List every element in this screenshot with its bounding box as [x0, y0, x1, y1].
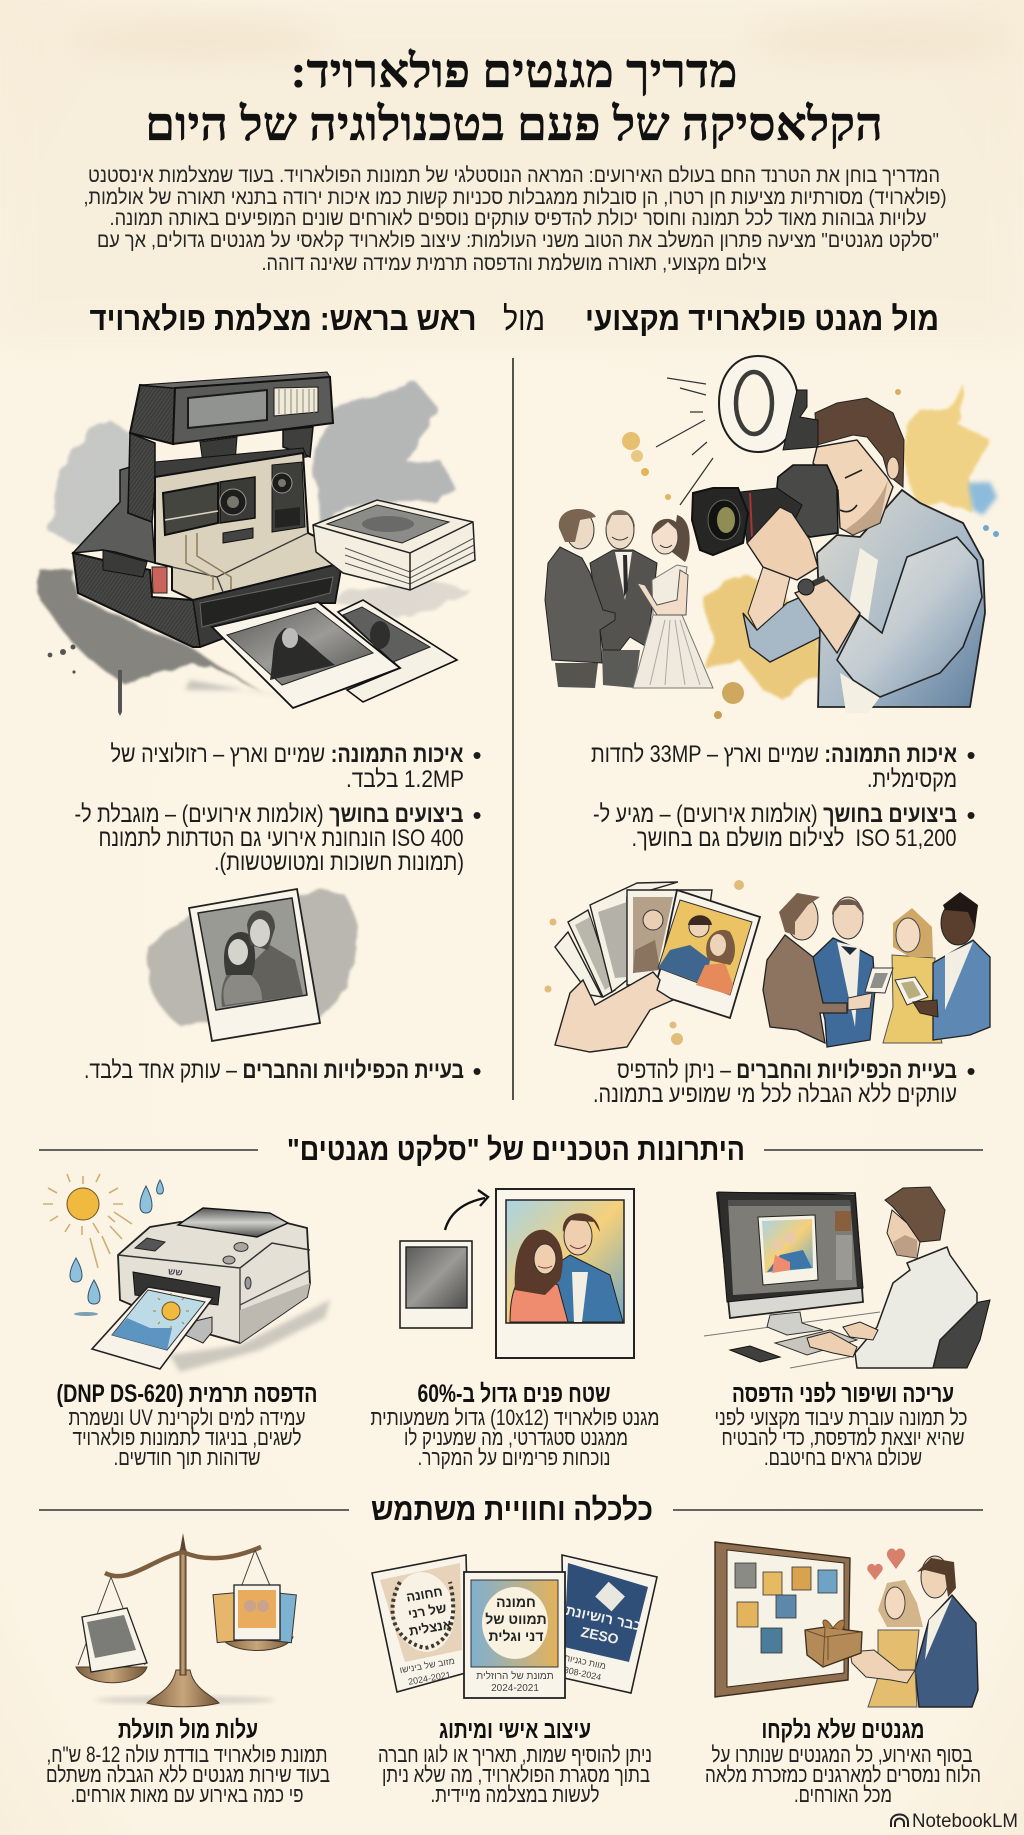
film slot [200, 577, 333, 627]
illustration: custom polaroid designs [372, 1555, 657, 1698]
camera base [73, 553, 342, 647]
photographer arms and hands [743, 590, 820, 662]
column: cost versus benefit text: פי כמה באירוע עם מאות אורחים. [70, 1782, 304, 1807]
column: thermal print text: לשגים, בניגוד לתמונות פולארויד [72, 1425, 302, 1450]
panel: polaroid column bullets top: • [472, 800, 482, 830]
panel: polaroid column bullets top: ביצועים בחושך (אולמות אירועים) – מוגבלת ל- [74, 801, 463, 828]
intro paragraph: המדריך בוחן את הטרנד החם בעולם האירועים: המראה הנוסטלגי של תמונות הפולארויד. בעוד שמצלמות אינסטנט [88, 164, 940, 187]
camera arms [128, 433, 155, 522]
printed photo [92, 1287, 213, 1369]
comparison heading: ראש בראש: מצלמת פולארויד [90, 300, 476, 337]
panel: polaroid duplicates bullet: • [472, 1056, 482, 1086]
comparison heading: מול [503, 300, 545, 337]
column: cost versus benefit text: תמונת פולארויד בודדת עולה 8-12 ש"ח, [47, 1742, 328, 1767]
panel: polaroid camera illustration [40, 372, 475, 716]
column: thermal print text: הדפסה תרמית (DNP DS-620) [56, 1380, 317, 1408]
illustration: custom polaroid designs: של רני [407, 1600, 448, 1622]
panel: professional duplicates bullet: עותקים ללא הגבלה לכל מי שמופיע בתמונה. [593, 1081, 957, 1108]
illustration: friends with printed polaroids [544, 880, 990, 1052]
comparison heading: מול מגנט פולארויד מקצועי [585, 300, 939, 337]
hand fan of photos [555, 882, 760, 1018]
panel: professional column bullets top: • [966, 800, 976, 830]
intro paragraph: צילום מקצועי, תאורה מושלמת והדפסה תרמית עמידה שאינה דוהה. [262, 252, 766, 275]
group of four guests [763, 892, 990, 1047]
column: personal design text: ניתן להוסיף שמות, תאריך או לוגו חברה [378, 1742, 652, 1767]
panel: polaroid column bullets top: איכות התמונה: שמיים וארץ – רזולוציה של [110, 741, 464, 768]
panel: polaroid duplicates bullet: בעיית הכפילויות והחברים – עותק אחד בלבד. [84, 1057, 464, 1084]
column: thermal print text: שדוהות תוך חודשים. [114, 1445, 260, 1470]
section heading: economy and experience: כלכלה וחוויית משתמש [371, 1492, 653, 1527]
panel: professional column bullets top [591, 740, 976, 852]
illustration: custom polaroid designs: כבר רושיונת [564, 1602, 643, 1633]
column: unclaimed magnets text [705, 1716, 981, 1807]
hand holding photos [555, 972, 673, 1052]
column: unclaimed magnets text: מגנטים שלא נלקחו [762, 1716, 924, 1744]
front photo [212, 602, 400, 708]
column: editing text [714, 1380, 968, 1470]
section heading: technical advantages: היתרונות הטכניים של "סלקט מגנטים" [287, 1132, 745, 1167]
illustration: magnet board and couple [715, 1542, 978, 1707]
panel: polaroid column bullets top: ISO 400 הונחונת אירועי גם הטדתות לתמונח [98, 825, 464, 852]
illustration: size comparison polaroids [400, 1189, 634, 1358]
panel: professional column bullets top: • [966, 740, 976, 770]
intro paragraph [84, 164, 946, 275]
illustration: single grey polaroid [148, 889, 359, 1041]
illustration: custom polaroid designs: 2024-2021 [407, 1670, 451, 1687]
column: thermal print text: עמידה למים ולקרינת UV ונשמרת [68, 1405, 306, 1430]
title: הקלאסיקה של פעם בטכנולוגיה של היום [145, 99, 883, 151]
photographer shirt [817, 490, 985, 707]
column: cost versus benefit text: עלות מול תועלת [118, 1716, 258, 1744]
illustration: custom polaroid designs: חמונה [496, 1594, 536, 1610]
flash bar [130, 385, 175, 444]
illustration: custom polaroid designs: אנצלית [408, 1617, 453, 1639]
red shutter tab [152, 567, 167, 593]
illustration: thermal printer with sun and water: שש [168, 1266, 183, 1278]
photographer head [813, 440, 893, 535]
illustration: designer editing at computer [704, 1187, 990, 1368]
column: personal design text [378, 1716, 652, 1807]
printer body [118, 1222, 310, 1343]
illustration: custom polaroid designs: חחונה [405, 1584, 444, 1605]
column: size text: שטח פנים גדול ב-60% [418, 1380, 610, 1408]
illustration: custom polaroid designs: מזוב של בינישו [399, 1656, 455, 1675]
title: מדריך מגנטים פולארויד: [290, 46, 738, 98]
panel: professional column bullets top: ISO 51,200 לצילום מושלם גם בחושך. [632, 825, 956, 852]
title [145, 46, 883, 151]
column: editing text: עריכה ושיפור לפני הדפסה [732, 1380, 954, 1408]
ring light [719, 356, 798, 452]
column: size text [370, 1380, 660, 1470]
illustration: custom polaroid designs: 2024-2021 [491, 1683, 539, 1694]
panel: professional duplicates bullet [593, 1056, 976, 1108]
illustration: custom polaroid designs: תמונת של הרוזלית [476, 1670, 554, 1682]
arrow [445, 1190, 488, 1230]
NotebookLM logo: NotebookLM [912, 1811, 1018, 1832]
panel: professional column bullets top: איכות התמונה: שמיים וארץ – 33MP לחדות [591, 741, 957, 768]
panel: professional duplicates bullet: בעיית הכפילויות והחברים – ניתן להדפיס [617, 1057, 957, 1084]
illustration: custom polaroid designs: דני וגלית [489, 1628, 543, 1644]
illustration: custom polaroid designs: מוות כגניות [563, 1652, 607, 1671]
panel: polaroid column bullets top: • [472, 740, 482, 770]
side panel [73, 467, 155, 563]
panel: professional column bullets top: מקסימלית. [867, 766, 957, 793]
illustration: balance scale [76, 1533, 296, 1707]
illustration: thermal printer with sun and water [43, 1174, 330, 1372]
column: personal design text: עיצוב אישי ומיתוג [439, 1716, 591, 1744]
DSLR camera [777, 465, 838, 537]
column: cost versus benefit text: בעוד שירות מגנטים ללא הגבלה משתלם [46, 1762, 330, 1787]
designer body [855, 1247, 977, 1368]
illustration: custom polaroid designs: 308-2024 [563, 1665, 602, 1682]
back photo [338, 600, 457, 702]
panel: polaroid column bullets top [74, 740, 482, 876]
comparison heading [90, 300, 939, 337]
column: size text: ממגנט סטגדרטי, מה שמעניק לו [404, 1425, 628, 1450]
column: thermal print text [56, 1380, 317, 1470]
illustration: custom polaroid designs: תמווט של [485, 1611, 547, 1627]
column: editing text: שכולם גראים בחיטבם. [764, 1445, 922, 1470]
intro paragraph: "סלקט מגנטים" מציעה פתרון המשלב את הטוב משני העולמות: עיצוב פולארויד קלאסי על מגנטים גדולים, אך עם [97, 229, 939, 252]
panel: professional column bullets top: ביצועים בחושך (אולמות אירועים) – מגיע ל- [593, 801, 957, 828]
flash rays [656, 378, 713, 505]
wedding guests [545, 509, 713, 688]
panel: photographer illustration [545, 356, 999, 719]
panel: polaroid column bullets top: (תמונות חשוכות ומטושטשות). [214, 849, 464, 876]
panel: polaroid column bullets top: 1.2MP בלבד. [346, 766, 464, 793]
column: cost versus benefit text [46, 1716, 330, 1807]
column: personal design text: לעשות במצלמה מיידית. [430, 1782, 600, 1807]
column: size text: מגנט פולארויד (10x12) גדול משמעותית [370, 1405, 660, 1430]
illustration: custom polaroid designs: ZESO [580, 1624, 620, 1647]
photo stack [313, 500, 475, 590]
column: personal design text: בתוך מסגרת הפולארויד, מה שלא ניתן [382, 1762, 650, 1787]
intro paragraph: עלויות גבוהות מאוד לכל תמונה וחוסר יכולת להדפיס עותקים נוספים לאורחים שונים המופיעים באותה תמונה. [110, 207, 926, 230]
column: size text: נוכחות פרימיום על המקרר. [418, 1445, 610, 1470]
panel: professional duplicates bullet: • [966, 1056, 976, 1086]
chair [930, 1300, 990, 1368]
column: unclaimed magnets text: מכל האורחים. [794, 1782, 892, 1807]
camera body [155, 448, 307, 477]
